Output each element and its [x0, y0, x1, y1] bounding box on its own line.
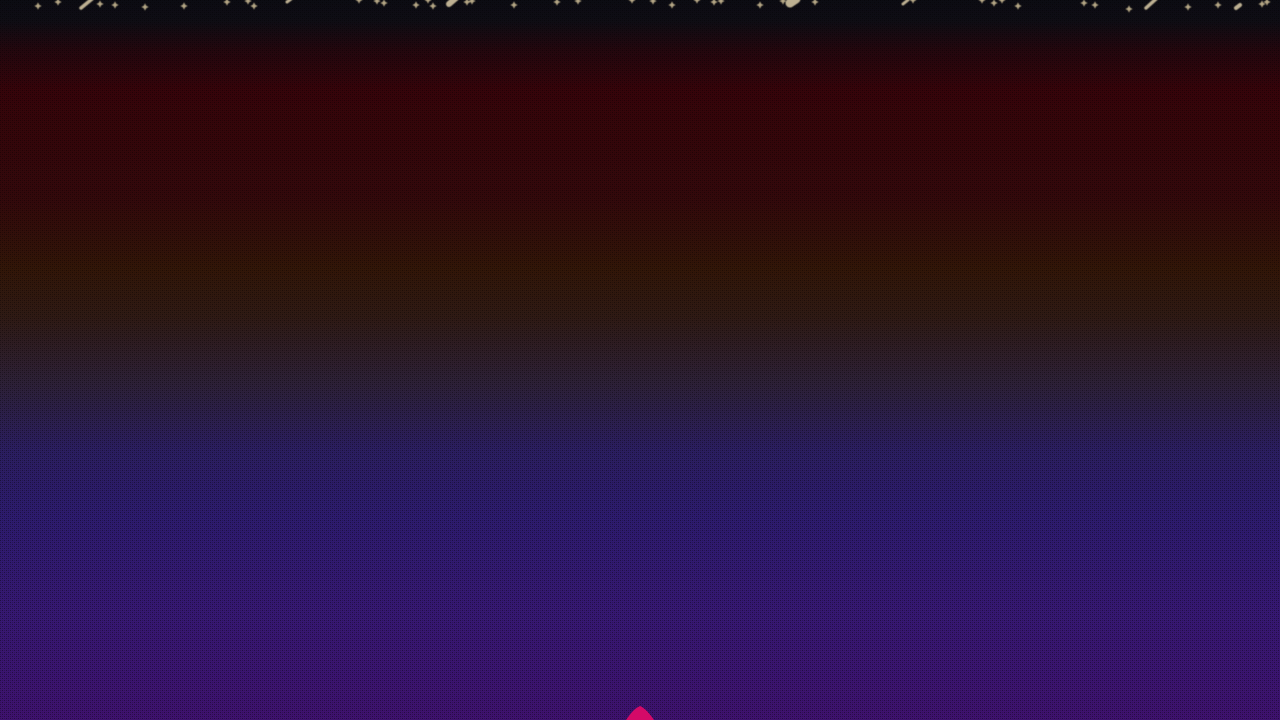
- rocket nose rising at bottom centre: [626, 706, 654, 720]
- comets and meteor streaks: [81, 0, 1240, 8]
- starfield along the top edge: [34, 0, 1271, 13]
